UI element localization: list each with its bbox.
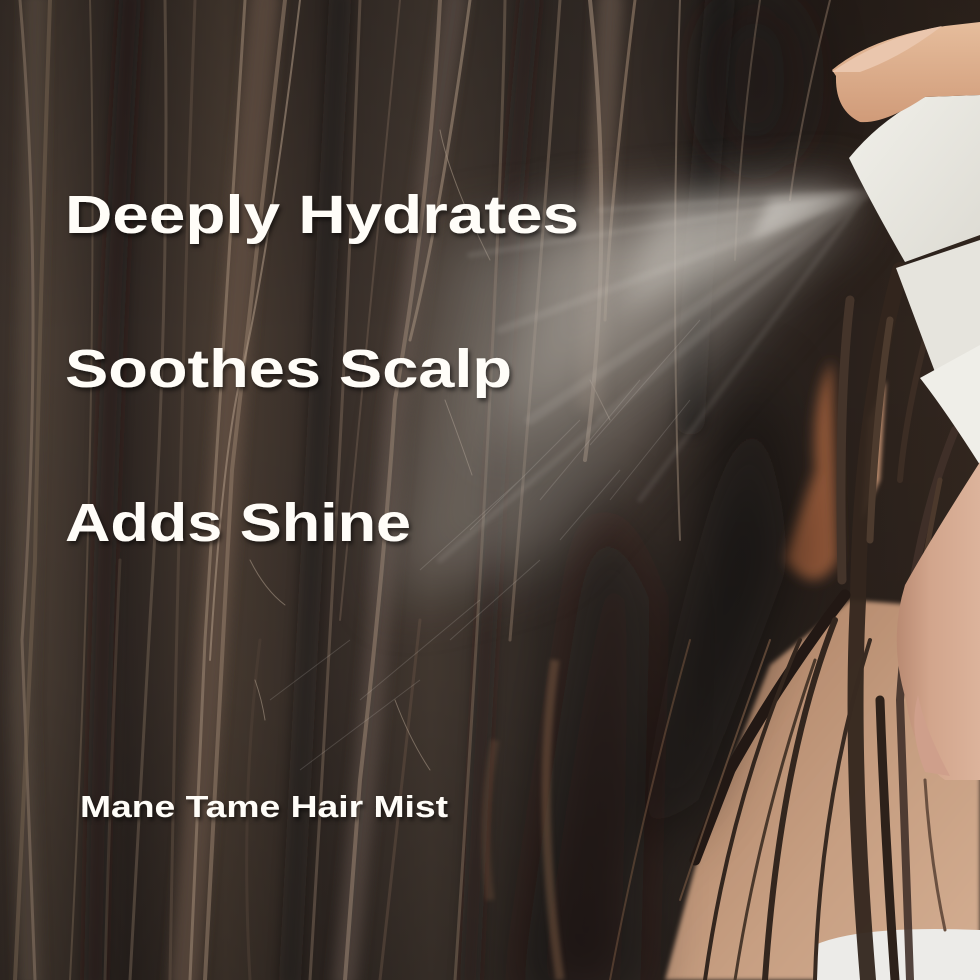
text block: benefits — [65, 185, 579, 553]
spray mist cone — [270, 192, 866, 770]
heading: Soothes Scalp: Soothes Scalp — [65, 339, 512, 399]
icon: white spray bottle — [849, 95, 980, 465]
icon: hand holding bottle — [897, 462, 980, 780]
heading: Deeply Hydrates: Deeply Hydrates — [65, 185, 579, 245]
heading: Adds Shine: Adds Shine — [65, 493, 411, 553]
product name: Mane Tame Hair Mist — [80, 789, 448, 824]
dark hair falling over neck — [680, 270, 955, 980]
icon: finger on spray nozzle — [832, 22, 980, 122]
skin: neck and shoulder — [665, 360, 980, 980]
